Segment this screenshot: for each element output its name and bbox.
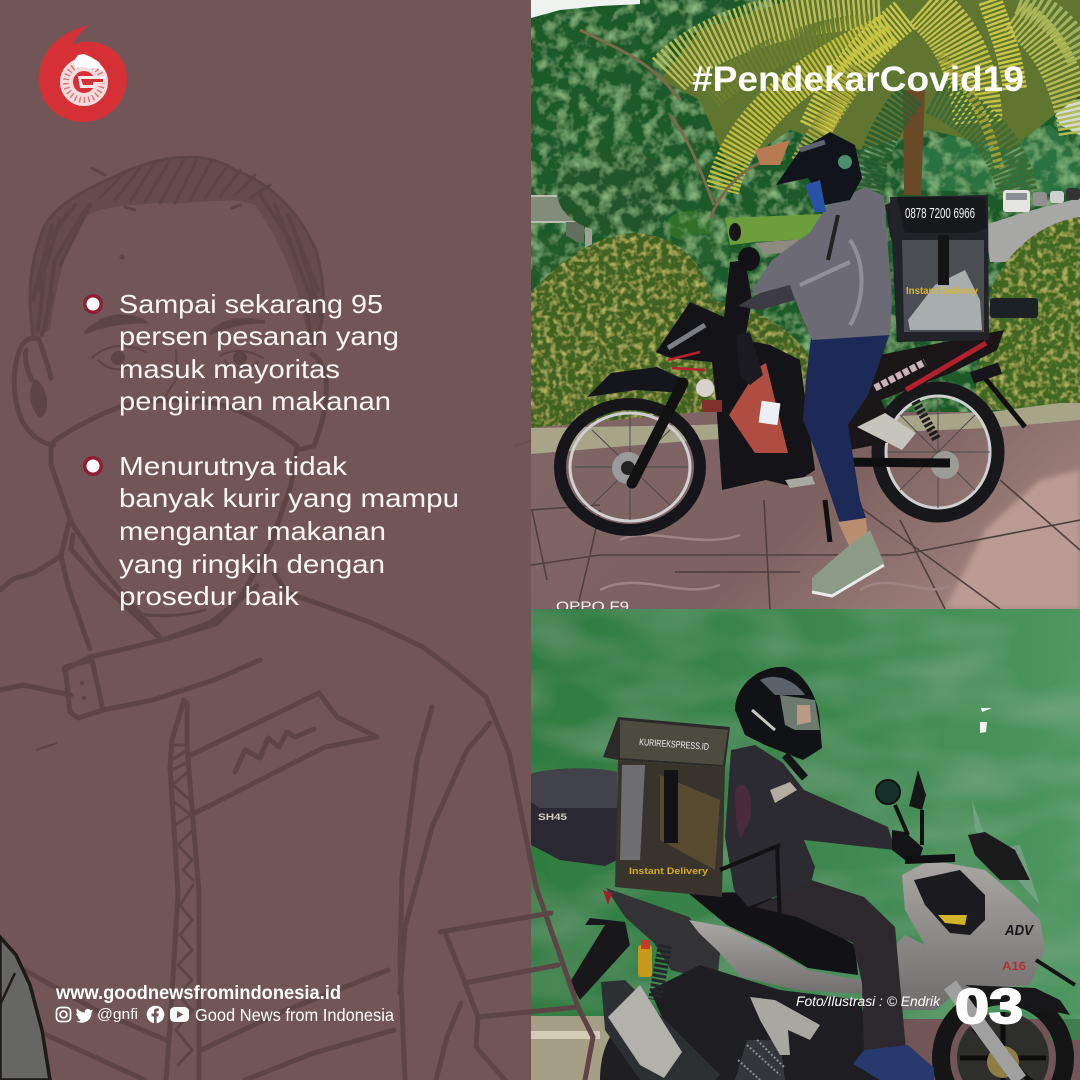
icon: instagram (56, 1008, 70, 1022)
scooter body (570, 800, 1075, 1080)
big hedge, left (531, 233, 809, 428)
pants (755, 880, 906, 1053)
chrome bracket (857, 413, 916, 450)
bullet text: prosedur baik (119, 581, 300, 611)
white paint chips (980, 708, 992, 733)
silver side panel (689, 920, 916, 997)
bullet text: Menurutnya tidak (119, 451, 348, 481)
illustration: masked man line drawing (0, 157, 593, 1080)
hair (30, 157, 323, 345)
handle: @gnfi: @gnfi (97, 1006, 138, 1023)
silver engine bracket (750, 997, 820, 1055)
rider: black jacket and pants (720, 667, 955, 1080)
photo credit: Foto/Ilustrasi : © Endrik (796, 994, 941, 1009)
distant building roof (755, 140, 790, 165)
sneaker (812, 530, 884, 596)
white ring (66, 64, 102, 100)
page number: 03 (955, 980, 1023, 1034)
front fairing tip and fender (1036, 960, 1075, 985)
jacket (725, 745, 895, 907)
delivery backpack box (603, 717, 730, 897)
bullet text: pengiriman makanan (119, 386, 391, 416)
pocket flap (191, 693, 377, 815)
G centre (78, 76, 106, 88)
eagle head (73, 54, 104, 71)
jacket folds and sleeve cuffs (19, 707, 578, 1080)
top case (531, 768, 617, 866)
bullet point 1 (83, 289, 399, 416)
bottle bag (745, 332, 763, 385)
bullet marker (83, 456, 103, 476)
helmet (735, 667, 822, 760)
yellow shock canister (638, 945, 652, 977)
organisation name: Good News from Indonesia (195, 1005, 394, 1025)
spring (655, 945, 665, 1000)
delivery box: 0878 7200 6966 (905, 205, 975, 222)
photo: courier on ADV scooter against green wall (531, 609, 1080, 1080)
ADV badge: ADV (1004, 922, 1035, 939)
handlebar (905, 858, 955, 860)
bullet text: persen pesanan yang (119, 321, 399, 351)
gloves (738, 285, 795, 310)
grey figure, bottom left (0, 937, 50, 1080)
dark inner panel (914, 870, 985, 935)
stray stroke (514, 441, 531, 446)
seat (688, 892, 858, 975)
collar button dots (82, 683, 84, 698)
face mask outline (51, 400, 297, 640)
helmet (776, 132, 862, 205)
grass lawn (725, 214, 822, 245)
mole (120, 254, 124, 260)
left tree branches (580, 30, 770, 220)
green wall (531, 609, 1080, 1019)
red shopping bag (729, 363, 788, 453)
right hedge (975, 217, 1080, 410)
logo: GNFI red swirl with eagle G (38, 25, 127, 122)
bullet text: masuk mayoritas (119, 354, 340, 384)
palm trunk (903, 90, 925, 195)
collar and shoulders (0, 522, 593, 1080)
top case: SH45 (538, 812, 567, 822)
bullet text (119, 289, 399, 416)
pavement and tiles (531, 403, 1080, 609)
rear fender (570, 918, 630, 1000)
mirror (729, 223, 741, 241)
motorcycle: Honda (560, 260, 1025, 542)
silver muffler (601, 980, 720, 1080)
front wheel (941, 996, 1065, 1080)
rear bodywork (848, 330, 1004, 450)
rear wheel (600, 1012, 700, 1080)
bullet list (83, 289, 459, 611)
photo: courier with Honda motorcycle by palm trees (524, 0, 1080, 614)
jacket (752, 187, 892, 340)
swingarm and chain (840, 462, 950, 463)
palm fronds (668, 0, 1080, 195)
front fork (950, 985, 1020, 1080)
red swirl (38, 25, 127, 122)
bullet text: mengantar makanan (119, 516, 386, 546)
bullet text (119, 451, 459, 611)
right ear (297, 354, 326, 450)
bullet marker (83, 294, 103, 314)
sky and background trees (531, 0, 1080, 430)
bullet point 2 (83, 451, 459, 611)
icon: twitter (76, 1008, 93, 1023)
glove (892, 830, 923, 860)
windscreen (972, 800, 1040, 905)
zipper (166, 700, 199, 1080)
left ear (14, 338, 54, 445)
windshield and fairing (656, 260, 815, 490)
skin ankle (838, 518, 868, 548)
website url: www.goodnewsfromindonesia.id (55, 983, 341, 1004)
delivery backpack box: Instant Delivery (629, 866, 709, 877)
front silver body (880, 860, 1045, 1010)
blue neck gaiter (805, 180, 826, 212)
scooter body: A16 (1002, 959, 1026, 973)
eyebrows (85, 316, 265, 334)
watermark: OPPO F9: OPPO F9 (556, 598, 629, 614)
left panel background (0, 0, 531, 1080)
shoe (853, 1045, 934, 1080)
rear wheel (878, 388, 998, 516)
metal fence (531, 193, 592, 248)
bullet text: yang ringkih dengan (119, 549, 385, 579)
bullet text: Sampai sekarang 95 (119, 289, 383, 319)
stone ground (531, 1016, 610, 1080)
bullet text: banyak kurir yang mampu (119, 483, 459, 513)
icon: youtube (170, 1007, 189, 1022)
front fender and forks (587, 367, 685, 397)
rider: grey jacket and navy pants (729, 132, 892, 596)
road and parked cars (985, 188, 1080, 262)
delivery backpack box: KURIREKSPRESS.ID (639, 737, 709, 753)
icon: facebook (147, 1006, 164, 1024)
delivery box: Instant Delivery (906, 286, 978, 297)
footer: website and social handles (55, 983, 394, 1025)
engine block (650, 965, 880, 1080)
hashtag title: #PendekarCovid19 (692, 60, 1024, 99)
eyes and nose (92, 346, 263, 398)
topiary bushes (557, 162, 730, 262)
mirrors (876, 780, 900, 804)
delivery box (885, 195, 1038, 342)
foot stand (825, 500, 830, 542)
instrument cluster (968, 832, 1030, 880)
pants (803, 333, 890, 523)
front wheel (560, 404, 700, 530)
tail section (606, 888, 720, 983)
